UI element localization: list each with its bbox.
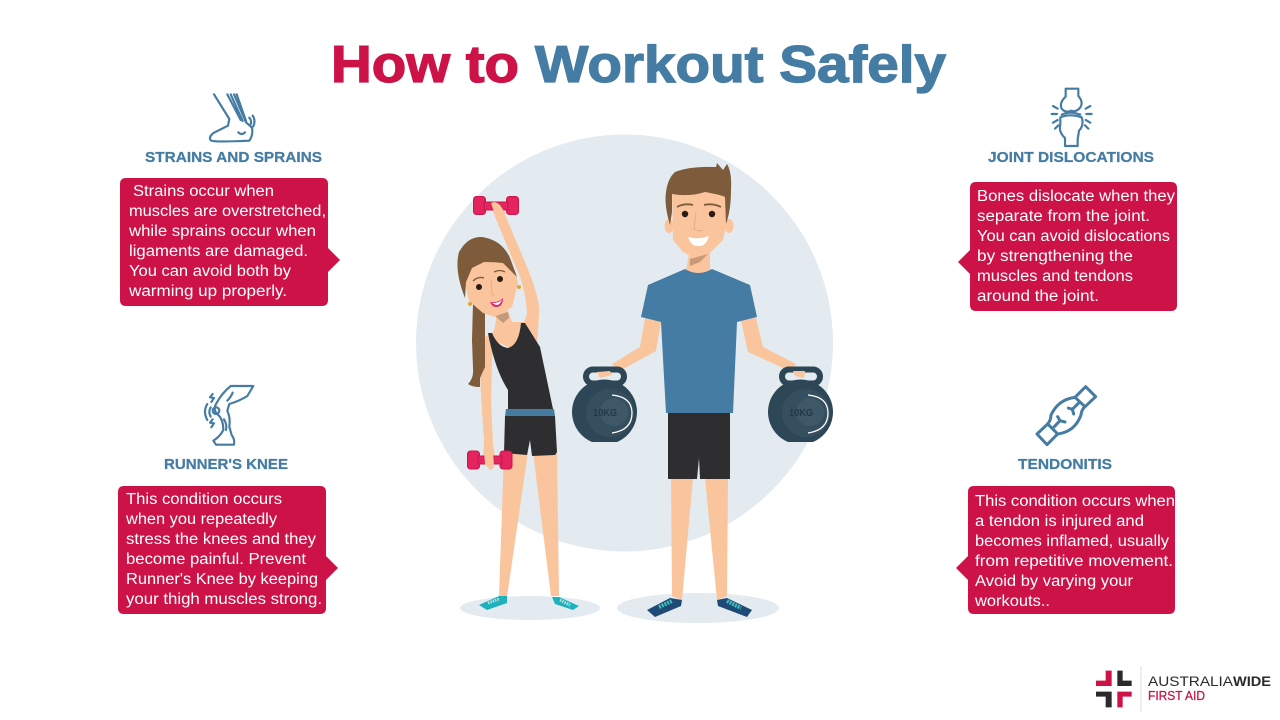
logo wordmark: AUSTRALIA xyxy=(1148,674,1233,689)
icon: knee xyxy=(205,386,253,445)
woman top dumbbell xyxy=(474,196,518,214)
callout text: muscles and tendons xyxy=(977,268,1133,285)
callout text: by strengthening the xyxy=(977,248,1133,265)
callout text: becomes inflamed, usually xyxy=(975,533,1169,550)
woman legs xyxy=(499,448,559,597)
man head xyxy=(672,190,727,257)
title: How to xyxy=(331,36,519,94)
heading: RUNNER'S KNEE xyxy=(164,457,288,473)
woman lowered arm xyxy=(479,337,496,462)
callout text: workouts.. xyxy=(974,593,1050,610)
man t-shirt xyxy=(641,269,757,413)
woman ponytail xyxy=(468,303,485,387)
woman hair xyxy=(457,237,517,298)
callout text: You can avoid both by xyxy=(129,263,291,280)
callout box xyxy=(118,486,338,614)
callout text: while sprains occur when xyxy=(128,223,316,240)
icon: tendon xyxy=(1037,387,1096,445)
ground shadow: man xyxy=(617,593,779,623)
background circle xyxy=(416,134,833,552)
panel: joint dislocations xyxy=(958,89,1177,311)
callout text: stress the knees and they xyxy=(126,531,316,548)
callout text: Avoid by varying your xyxy=(975,573,1133,590)
callout text xyxy=(125,491,322,608)
kettlebell left xyxy=(572,370,637,442)
man neck shadow xyxy=(690,254,708,266)
woman head xyxy=(465,260,518,317)
man ears xyxy=(664,219,734,233)
man hair xyxy=(666,163,731,225)
callout box xyxy=(956,486,1175,614)
man face features xyxy=(677,204,721,246)
man neck xyxy=(686,250,710,276)
callout box xyxy=(120,178,340,306)
callout text: You can avoid dislocations xyxy=(977,228,1170,245)
callout text: around the joint. xyxy=(977,288,1099,305)
callout text: This condition occurs xyxy=(126,491,282,508)
title: Workout Safely xyxy=(535,36,946,94)
icon: joint xyxy=(1052,89,1092,146)
panel: strains and sprains xyxy=(120,94,340,306)
callout box xyxy=(958,182,1177,311)
woman lower dumbbell xyxy=(468,450,512,470)
callout text: This condition occurs when xyxy=(975,493,1175,510)
woman face features xyxy=(468,270,521,307)
woman shoes xyxy=(479,596,579,610)
heading: TENDONITIS xyxy=(1018,457,1112,473)
man shorts xyxy=(668,412,730,479)
panel: tendonitis xyxy=(956,387,1175,614)
logo: Australia Wide First Aid xyxy=(1096,666,1271,712)
man shoes xyxy=(647,598,752,617)
logo: Australia Wide First Aid: WIDE xyxy=(1233,674,1271,689)
woman neck and shoulders xyxy=(480,310,537,352)
callout text: become painful. Prevent xyxy=(126,551,307,568)
callout text: your thigh muscles strong. xyxy=(126,591,322,608)
man arms xyxy=(612,318,796,372)
callout text: Bones dislocate when they xyxy=(977,188,1175,205)
callout text: ligaments are damaged. xyxy=(129,243,308,260)
kettlebell right: 10KG xyxy=(789,408,813,419)
callout text: muscles are overstretched, xyxy=(129,203,326,220)
callout text: a tendon is injured and xyxy=(975,513,1144,530)
icon: foot and ankle xyxy=(210,94,255,141)
woman tank top xyxy=(488,323,553,409)
logo cross mark xyxy=(1096,671,1132,707)
callout text: from repetitive movement. xyxy=(975,553,1173,570)
callout text: when you repeatedly xyxy=(125,511,277,528)
illustration: man xyxy=(572,163,833,617)
panel: runner's knee xyxy=(118,386,338,614)
illustration: woman xyxy=(457,196,579,610)
woman raised arm xyxy=(491,206,539,345)
logo subtitle: FIRST AID xyxy=(1148,689,1205,703)
callout text xyxy=(128,183,326,300)
callout text xyxy=(977,188,1175,305)
ground shadow: woman xyxy=(460,596,600,620)
callout text: Runner's Knee by keeping xyxy=(126,571,318,588)
kettlebell left: 10KG xyxy=(593,408,617,419)
woman shorts xyxy=(504,416,557,456)
callout text: Strains occur when xyxy=(133,183,274,200)
title xyxy=(331,36,946,94)
kettlebell right xyxy=(768,370,833,442)
heading: STRAINS AND SPRAINS xyxy=(145,150,322,166)
woman neck shadow xyxy=(495,312,509,323)
callout text: warming up properly. xyxy=(128,283,287,300)
callout text: separate from the joint. xyxy=(977,208,1150,225)
callout text xyxy=(974,493,1175,610)
heading: JOINT DISLOCATIONS xyxy=(988,150,1154,166)
man legs xyxy=(671,478,728,600)
woman waistband xyxy=(505,409,555,416)
